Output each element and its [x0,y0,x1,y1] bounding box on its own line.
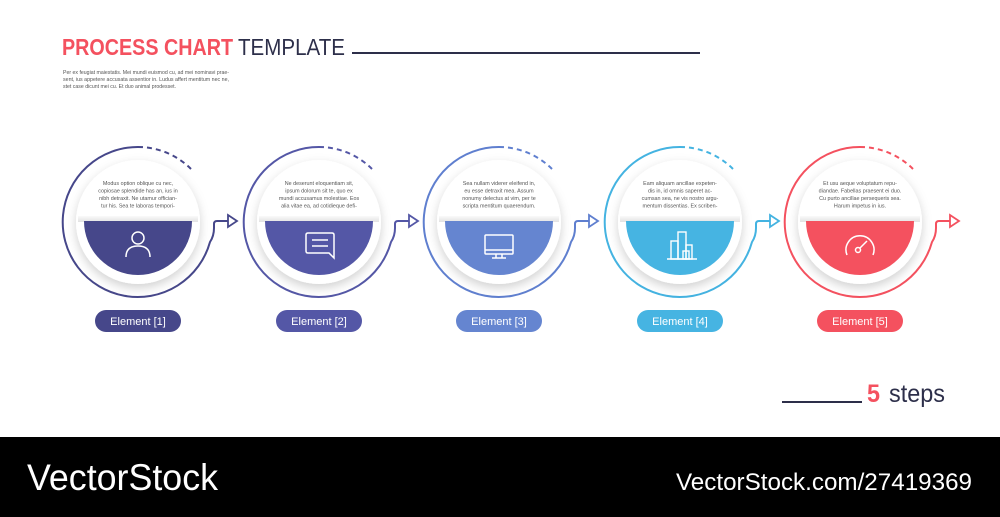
footer bar: VectorStock.com/27419369 [676,469,972,496]
5 steps caption [782,380,945,408]
step 2: Element [2] [291,316,347,328]
step 2: Ne deserunt eloquentiam sit, [285,181,354,187]
step 4: cumsan sea, ne vis nostro argu- [642,196,719,202]
step 1: nibh detraxit. Ne utamur offician- [99,196,177,202]
title [62,34,700,60]
label 1 [95,310,181,332]
step 1 [63,147,237,332]
step 3 [424,147,598,332]
5 steps caption: 5 [867,380,880,408]
step 2 [244,147,418,332]
step 5: Et usu aeque voluptatum repu- [823,181,897,187]
step 3: scripta mentitum quaerendum. [463,204,535,210]
icon: gauge [846,236,874,255]
step 4: Element [4] [652,316,708,328]
footer bar: VectorStock [27,457,218,498]
arrow 1 [228,215,237,227]
step 5: diandae. Fabellas praesent ei duo. [819,188,901,194]
icon: buildings [667,232,697,259]
intro text [63,70,229,90]
step 1: tur his. Sea te laboras tempori- [101,204,175,210]
step 5: Cu purto ancillae persequeris sea. [819,196,901,202]
title: PROCESS CHART [62,34,233,60]
footer bar [0,437,1000,517]
step 3: eu esse detraxit mea. Assum [464,188,534,194]
step 4: mentum dissentias. Ex scriben- [643,204,718,210]
step 4: dis in, id omnis saperet ac- [648,188,712,194]
step 2: ipsum dolorum sit te, quo ex [285,188,353,194]
step 4: Eam aliquam ancillae expeten- [643,181,717,187]
step 2: alia vitae ea, ad cotidieque defi- [281,204,357,210]
step 5: Harum impetus in ius. [834,204,886,210]
intro text: Per ex feugiat maiestatis. Mei mundi euismod cu, ad mei nominavi prae- [63,70,229,76]
title: TEMPLATE [238,34,345,60]
step 4 [605,147,779,332]
step 3: Element [3] [471,316,527,328]
step 5: Element [5] [832,316,888,328]
icon: monitor [485,235,513,258]
intro text: stet case dicunt mei cu. Et duo animal prodesset. [63,84,176,90]
step 3: Sea nullam viderer eleifend in, [463,181,536,187]
step 1: copiosae splendide has an, ius in [98,188,178,194]
5 steps caption: steps [889,380,945,408]
step 5 [785,147,959,332]
intro text: sent, ius appetere accusata assentior in. Ludus affert mentitum nec ne, [63,77,229,83]
step 1: Modus option oblique cu nec, [103,181,174,187]
step 2: mundi accusamus molestiae. Eos [279,196,359,202]
icon: chat [306,233,334,258]
step 3: nonumy delectus at vim, per te [462,196,536,202]
icon: user [126,232,150,257]
label 1: Element [1] [110,316,166,328]
